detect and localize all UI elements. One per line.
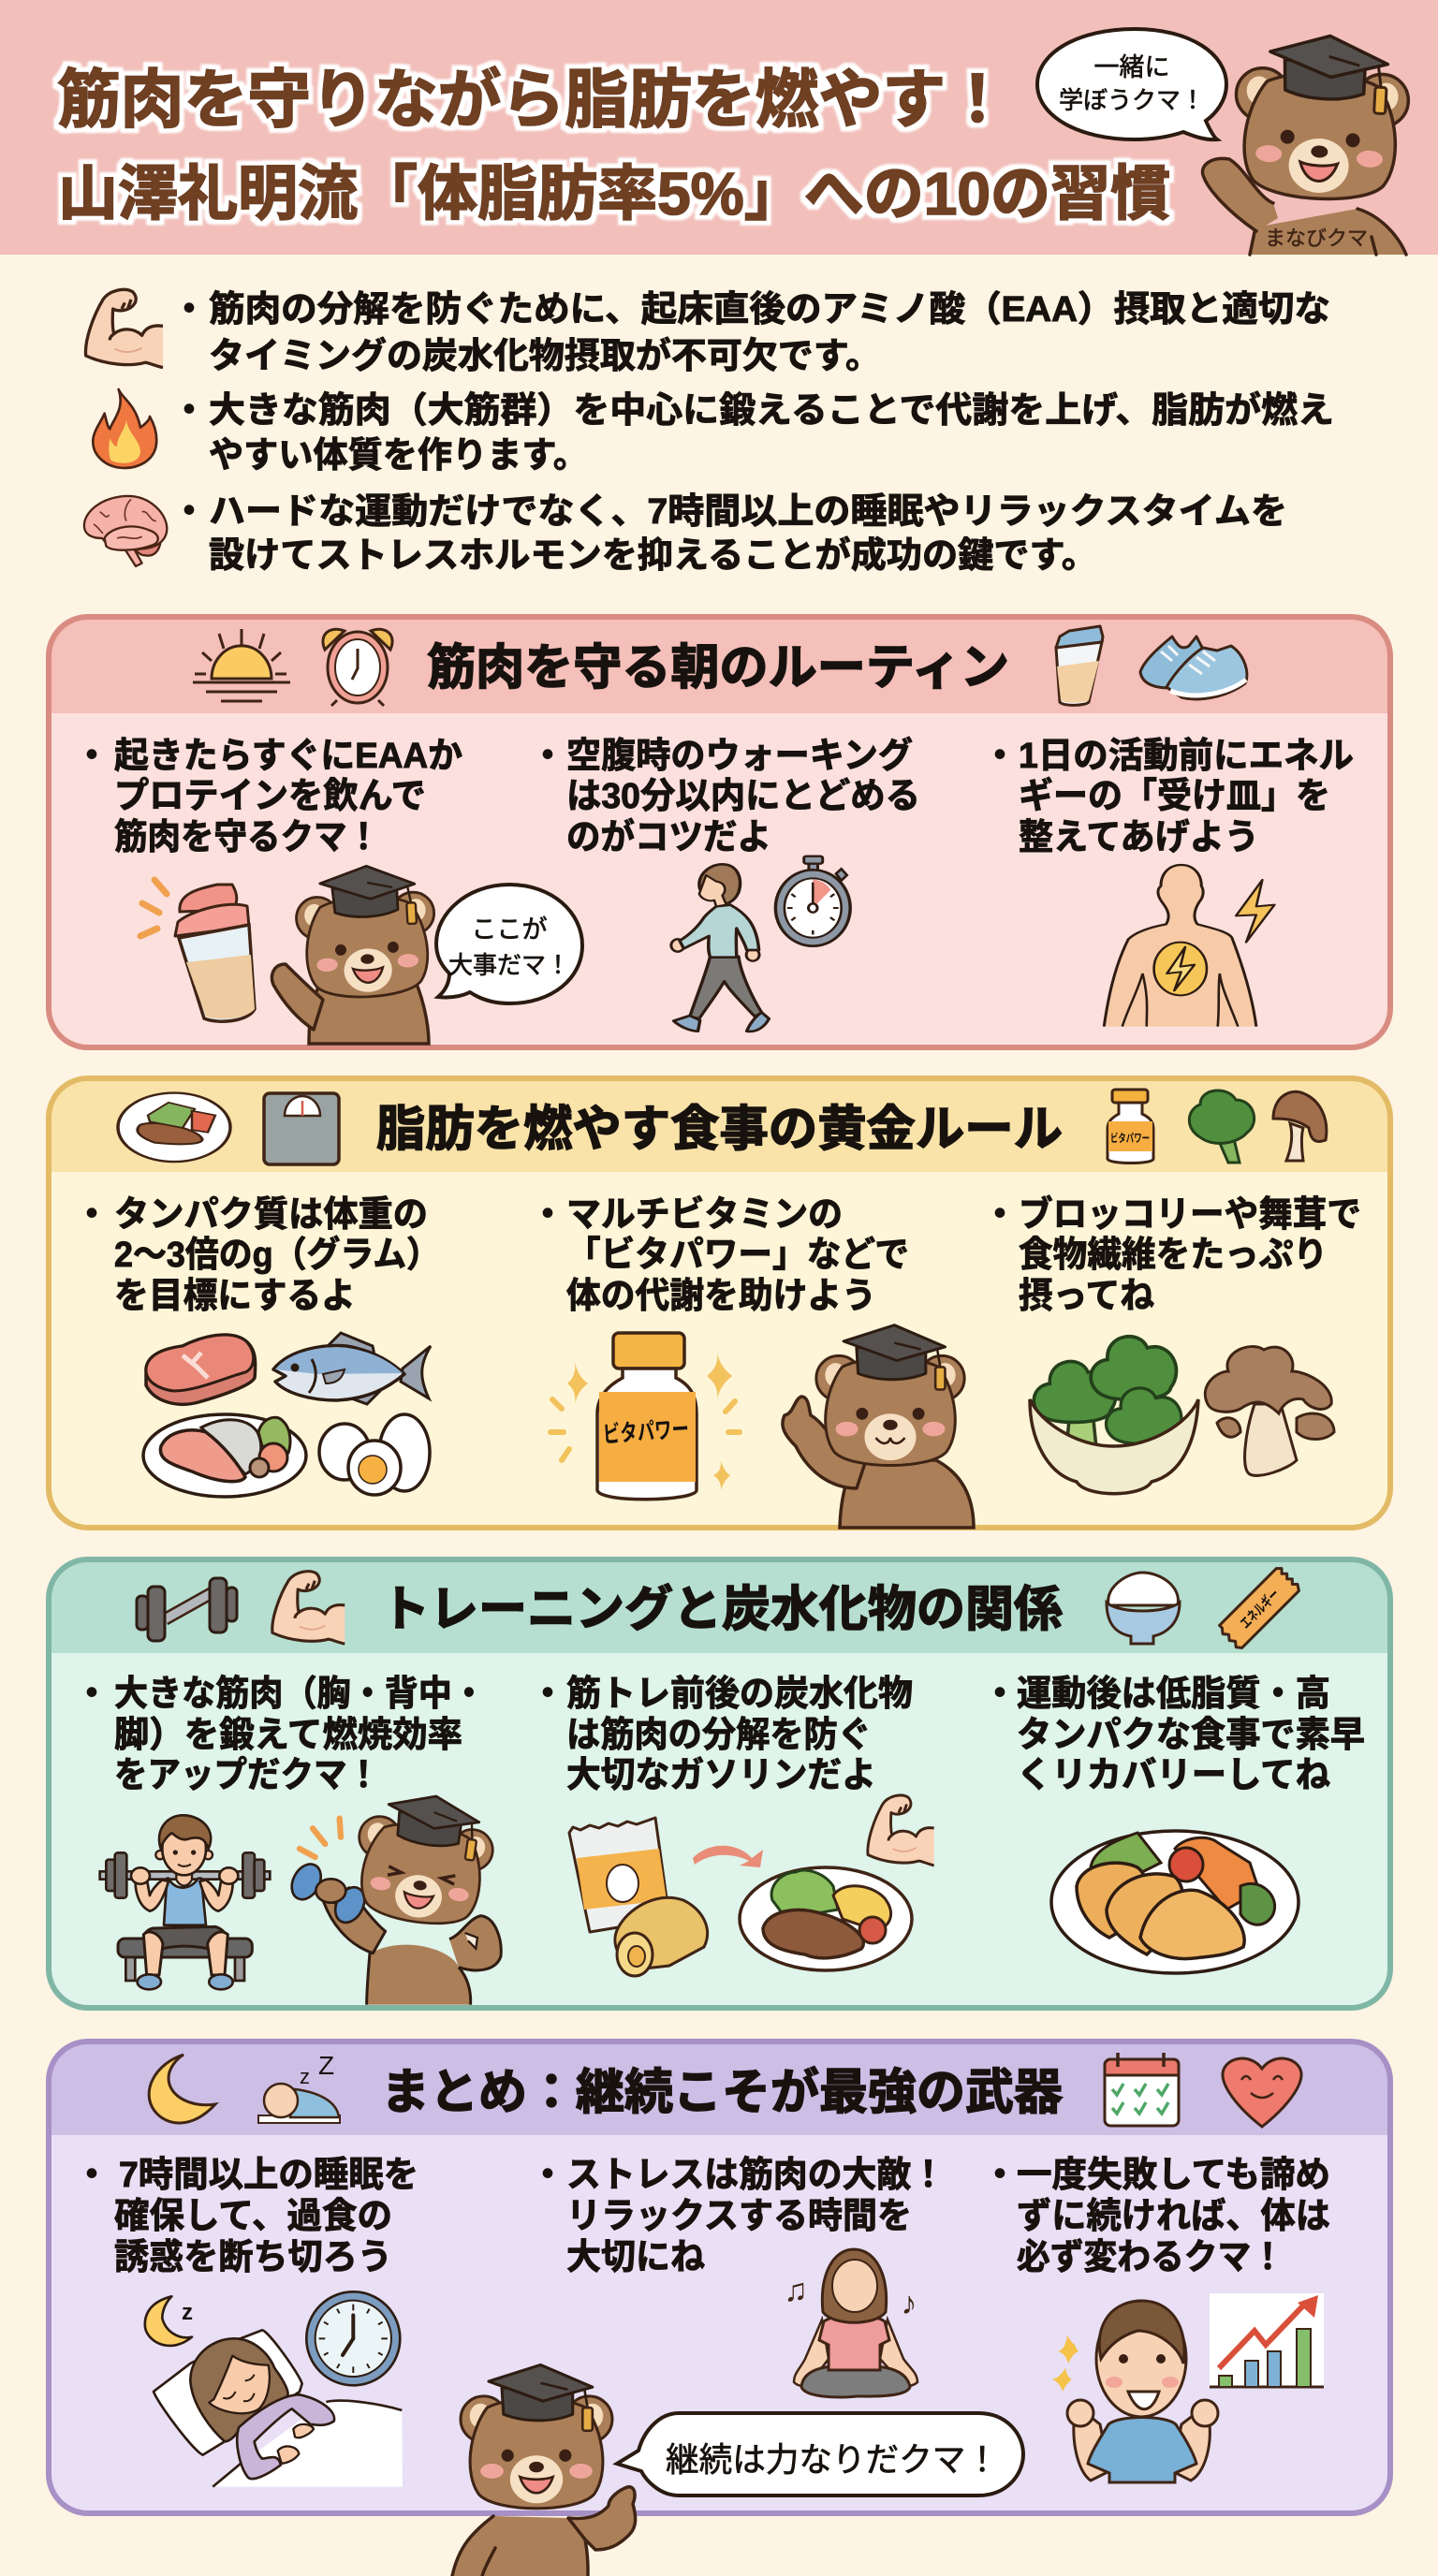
column 1 text (74, 2156, 418, 2277)
column 1 text: 起きたらすぐにEAAか (114, 737, 462, 776)
icon: arm (272, 1572, 345, 1644)
steak plate (740, 1867, 912, 1970)
column 2 text: は30分以内にとどめる (566, 777, 920, 816)
intro point 1: 筋肉の分解を防ぐために、起床直後のアミノ酸（EAA）摂取と適切な (209, 290, 1330, 329)
icon: running shoes (1140, 637, 1247, 699)
food: meat (146, 1335, 256, 1404)
column 2 text (530, 1195, 909, 1316)
column 2 text: ・ (530, 1675, 565, 1714)
icon: muscle arm (85, 289, 163, 368)
panel: diet rules (49, 1078, 1390, 1528)
column 2 text: 大切なガソリンだよ (566, 1756, 876, 1795)
cheering man (1052, 2301, 1218, 2482)
intro point 3: 設けてストレスホルモンを抑えることが成功の鍵です。 (209, 536, 1097, 576)
icon: sleeping baby: z (300, 2065, 310, 2088)
column 3 text: ずに続ければ、体は (1017, 2197, 1330, 2236)
title: 山澤礼明流「体脂肪率5%」への10の習慣 (58, 160, 1170, 227)
icon: supplement bottle: ビタパワー (1110, 1131, 1150, 1145)
speech bubble: important: ここが (472, 915, 547, 944)
column 1 text: ・ (74, 1195, 110, 1235)
column 2 text: のがコツだよ (566, 818, 771, 857)
food: fish (273, 1333, 431, 1404)
food: eggs (319, 1414, 430, 1495)
sleeping woman: z (182, 2300, 193, 2325)
pointing bear (452, 2364, 636, 2576)
column 3 text: ・ (982, 2156, 1018, 2195)
column 2 text (530, 2156, 946, 2277)
bear with dumbbell (286, 1787, 501, 2005)
icon: smiling heart (1223, 2058, 1301, 2127)
column 3 text: ブロッコリーや舞茸で (1019, 1194, 1361, 1235)
intro: key points (84, 289, 1334, 576)
icon: meal plate (118, 1093, 230, 1162)
arrow (693, 1846, 763, 1867)
icon: mushroom (1273, 1091, 1327, 1161)
maitake mushroom (1205, 1347, 1334, 1475)
panel: training and carbs (49, 1559, 1390, 2008)
column 2 text: 「ビタパワー」などで (566, 1236, 909, 1275)
body with energy (1104, 865, 1274, 1027)
speech bubble: perseverance (617, 2413, 1023, 2496)
column 3 text: ・ (982, 737, 1018, 776)
column 2 text: ・ (530, 2156, 565, 2195)
column 1 text: 筋肉を守るクマ！ (114, 818, 380, 857)
speech bubble: together (1037, 29, 1226, 139)
title: 筋肉を守りながら脂肪を燃やす！ (57, 65, 1009, 136)
column 2 text (530, 1675, 913, 1795)
column 3 text: 整えてあげよう (1019, 818, 1259, 857)
column 3 text: 摂ってね (1019, 1277, 1154, 1316)
bear with raised arm (272, 863, 438, 1044)
column 1 text: 7時間以上の睡眠を (119, 2156, 418, 2195)
cake roll (615, 1897, 708, 1976)
icon: broccoli (1189, 1090, 1255, 1163)
column 1 text: 誘惑を断ち切ろう (114, 2238, 392, 2277)
column 3 text: 運動後は低脂質・高 (1017, 1675, 1330, 1714)
icon: alarm clock (323, 629, 392, 706)
intro point 2: ・ (171, 391, 207, 431)
intro point 3 (171, 492, 1287, 576)
icon: brain (84, 496, 167, 566)
icon: rice bowl (1107, 1573, 1180, 1644)
column 3 text (982, 2156, 1330, 2277)
speech bubble: together: 一緒に (1093, 53, 1170, 81)
column 1 text: ・ (74, 737, 110, 776)
intro point 2: 大きな筋肉（大筋群）を中心に鍛えることで代謝を上げ、脂肪が燃え (209, 391, 1334, 431)
column 3 text: タンパクな食事で素早 (1017, 1716, 1365, 1755)
column 3 text: ・ (982, 1195, 1018, 1235)
column 1 text: を目標にするよ (114, 1277, 356, 1316)
intro point 1: ・ (171, 290, 207, 329)
speech bubble: important: 大事だマ！ (448, 951, 570, 979)
intro point 3: ・ (171, 492, 207, 532)
column 2 text: は筋肉の分解を防ぐ (566, 1716, 872, 1755)
column 2 text: 空腹時のウォーキング (566, 737, 913, 776)
heading: 筋肉を守る朝のルーティン (427, 641, 1009, 695)
intro point 2 (171, 391, 1334, 476)
column 2 text: リラックスする時間を (566, 2197, 912, 2236)
meditating woman (784, 2249, 917, 2397)
icon: energy bar: エネルギー (1238, 1587, 1283, 1632)
bottle with sparkles (550, 1333, 740, 1500)
column 3 text (982, 737, 1354, 857)
column 1 text: 2〜3倍のg（グラム） (114, 1236, 440, 1275)
icon: sleeping baby: Z (318, 2051, 334, 2080)
heading: トレーニングと炭水化物の関係 (381, 1583, 1063, 1637)
title (57, 65, 1170, 227)
bear mascot (1203, 31, 1412, 255)
icon: dumbbell (137, 1578, 237, 1641)
icon: weight scale (264, 1093, 339, 1164)
column 1 text: 確保して、過食の (114, 2197, 392, 2236)
column 1 text: 脚）を鍛えて燃焼効率 (114, 1716, 462, 1755)
speech bubble: perseverance: 継続は力なりだクマ！ (666, 2440, 999, 2479)
icon: flame (93, 389, 156, 468)
column 3 text: 1日の活動前にエネル (1019, 737, 1354, 776)
meditating woman: ♪ (901, 2286, 917, 2321)
meditating woman: ♫ (784, 2273, 808, 2308)
icon: calendar (1105, 2053, 1179, 2126)
column 3 text: ギーの「受け皿」を (1019, 777, 1330, 816)
walking person (671, 864, 769, 1032)
column 3 text: ・ (982, 1675, 1018, 1714)
icon: sunrise (193, 629, 290, 701)
illustration: shaker (140, 880, 255, 1021)
icon: crescent moon (149, 2055, 215, 2123)
bear mascot: まなびクマ (1265, 227, 1368, 250)
panel: morning routine (49, 617, 1390, 1047)
header banner (0, 0, 1438, 255)
speech bubble: together: 学ぼうクマ！ (1059, 86, 1205, 114)
heading: 脂肪を燃やす食事の黄金ルール (376, 1103, 1063, 1157)
column 1 text (74, 1195, 440, 1316)
speech bubble: important (436, 885, 582, 1003)
column 1 text (74, 737, 462, 857)
column 2 text: ・ (530, 1195, 565, 1235)
snack pack (569, 1818, 669, 1932)
column 2 text: マルチビタミンの (566, 1195, 843, 1235)
icon: protein shaker (1056, 626, 1103, 705)
bottle with sparkles: ビタパワー (602, 1416, 690, 1448)
bear thumbs up (783, 1325, 974, 1528)
icon: supplement bottle (1108, 1090, 1153, 1163)
food: salmon plate (143, 1414, 306, 1497)
icon: sleeping baby (258, 2051, 340, 2123)
stopwatch (775, 856, 850, 946)
intro point 2: やすい体質を作ります。 (209, 436, 588, 476)
column 1 text: ・ (74, 1675, 110, 1714)
intro point 1 (171, 290, 1330, 376)
chicken plate (1051, 1831, 1299, 1973)
column 2 text: ストレスは筋肉の大敵！ (566, 2156, 946, 2195)
man bench pressing (100, 1815, 270, 1989)
icon: energy bar (1217, 1566, 1301, 1650)
column 2 text (530, 737, 920, 857)
column 2 text: 体の代謝を助けよう (566, 1277, 876, 1316)
bowl of broccoli (1030, 1337, 1198, 1494)
column 1 text: をアップだクマ！ (114, 1756, 380, 1795)
column 3 text (982, 1194, 1361, 1316)
intro point 3: ハードな運動だけでなく、7時間以上の睡眠やリラックスタイムを (209, 492, 1287, 532)
intro point 1: タイミングの炭水化物摂取が不可欠です。 (209, 337, 881, 376)
column 3 text: くリカバリーしてね (1017, 1756, 1330, 1795)
flexed arm (868, 1795, 934, 1866)
growth chart (1210, 2293, 1324, 2387)
sleeping woman (145, 2291, 403, 2487)
column 3 text: 一度失敗しても諦め (1017, 2156, 1330, 2195)
column 1 text: 大きな筋肉（胸・背中・ (114, 1675, 486, 1714)
panel: summary (49, 2042, 1390, 2576)
column 2 text: 大切にね (566, 2238, 705, 2277)
column 3 text: 食物繊維をたっぷり (1019, 1236, 1328, 1275)
column 1 text (74, 1675, 486, 1795)
column 2 text: 筋トレ前後の炭水化物 (566, 1675, 913, 1714)
column 3 text: 必ず変わるクマ！ (1017, 2238, 1284, 2277)
column 2 text: ・ (530, 737, 565, 776)
heading: まとめ：継続こそが最強の武器 (381, 2066, 1063, 2120)
column 1 text: ・ (74, 2156, 110, 2195)
column 1 text: プロテインを飲んで (114, 777, 426, 816)
column 1 text: タンパク質は体重の (114, 1195, 428, 1235)
column 3 text (982, 1675, 1365, 1795)
